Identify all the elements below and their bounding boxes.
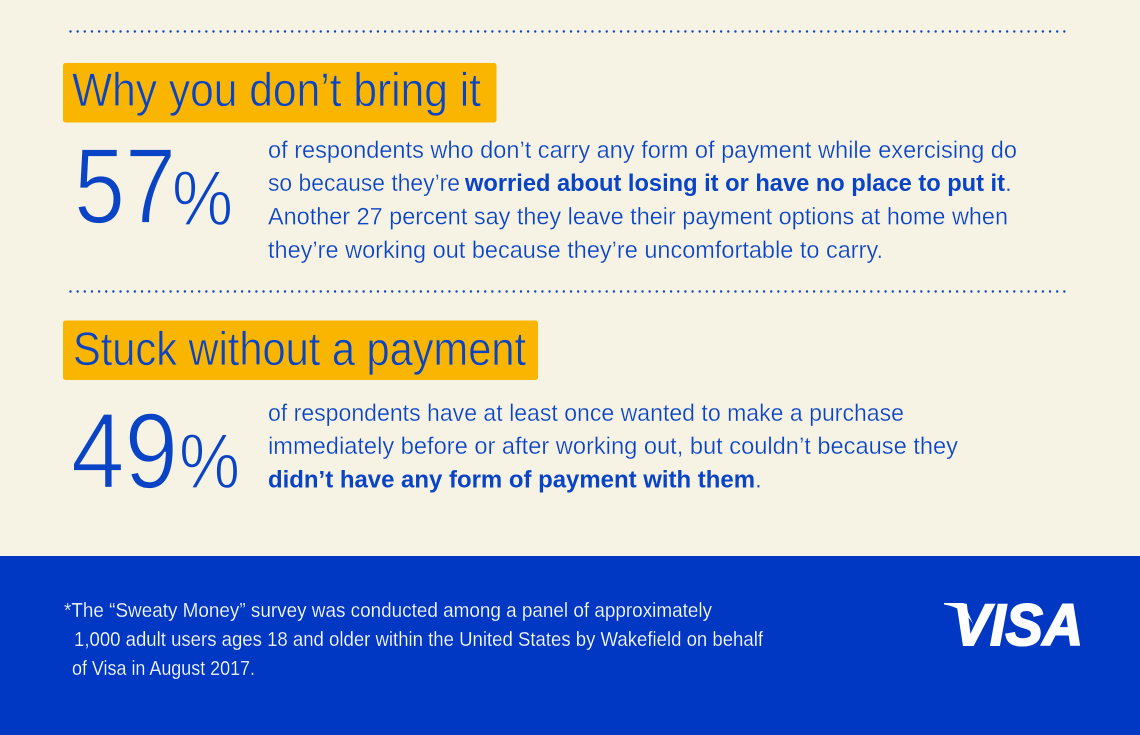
heading: stuck without a payment: Stuck without a payment: [73, 322, 526, 375]
text block: missed purchases: didn’t have any form of payment with them: [268, 466, 755, 494]
text block: reasons for not carrying payment: they’re working out because they’re uncomfortable to carry.: [268, 237, 883, 264]
text block: reasons for not carrying payment: so because they’re: [268, 170, 460, 197]
statistic: 57 percent: 57: [74, 125, 176, 246]
text block: reasons for not carrying payment: .: [1005, 170, 1012, 197]
text block: missed purchases: .: [755, 466, 762, 494]
statistic: 57 percent: %: [172, 154, 233, 242]
footer band: [0, 556, 1140, 735]
text block: survey footnote: [64, 600, 763, 680]
text block: survey footnote: *The “Sweaty Money” survey was conducted among a panel of approximately: [64, 600, 712, 622]
text block: reasons for not carrying payment: worried about losing it or have no place to put it: [464, 170, 1005, 197]
statistic: 49 percent: 49: [71, 390, 178, 511]
statistic: 49 percent: %: [179, 417, 240, 505]
text block: reasons for not carrying payment: of respondents who don’t carry any form of payment while exercising do: [268, 137, 1017, 164]
text block: survey footnote: of Visa in August 2017.: [72, 658, 255, 680]
text block: missed purchases: [268, 400, 959, 494]
logo: Visa: VISA: [953, 593, 1083, 658]
text block: reasons for not carrying payment: Another 27 percent say they leave their payment options at home when: [268, 204, 1008, 230]
panel: why you don't bring it: [63, 63, 1017, 264]
text block: reasons for not carrying payment: [268, 137, 1017, 264]
text block: missed purchases: immediately before or after working out, but couldn’t because they: [268, 433, 959, 460]
text block: missed purchases: of respondents have at least once wanted to make a purchase: [268, 400, 904, 427]
panel: stuck without a payment: [63, 320, 959, 511]
text block: survey footnote: 1,000 adult users ages 18 and older within the United States by Wakefield on behalf: [74, 629, 763, 651]
heading: why you don't bring it: Why you don’t bring it: [72, 63, 481, 116]
